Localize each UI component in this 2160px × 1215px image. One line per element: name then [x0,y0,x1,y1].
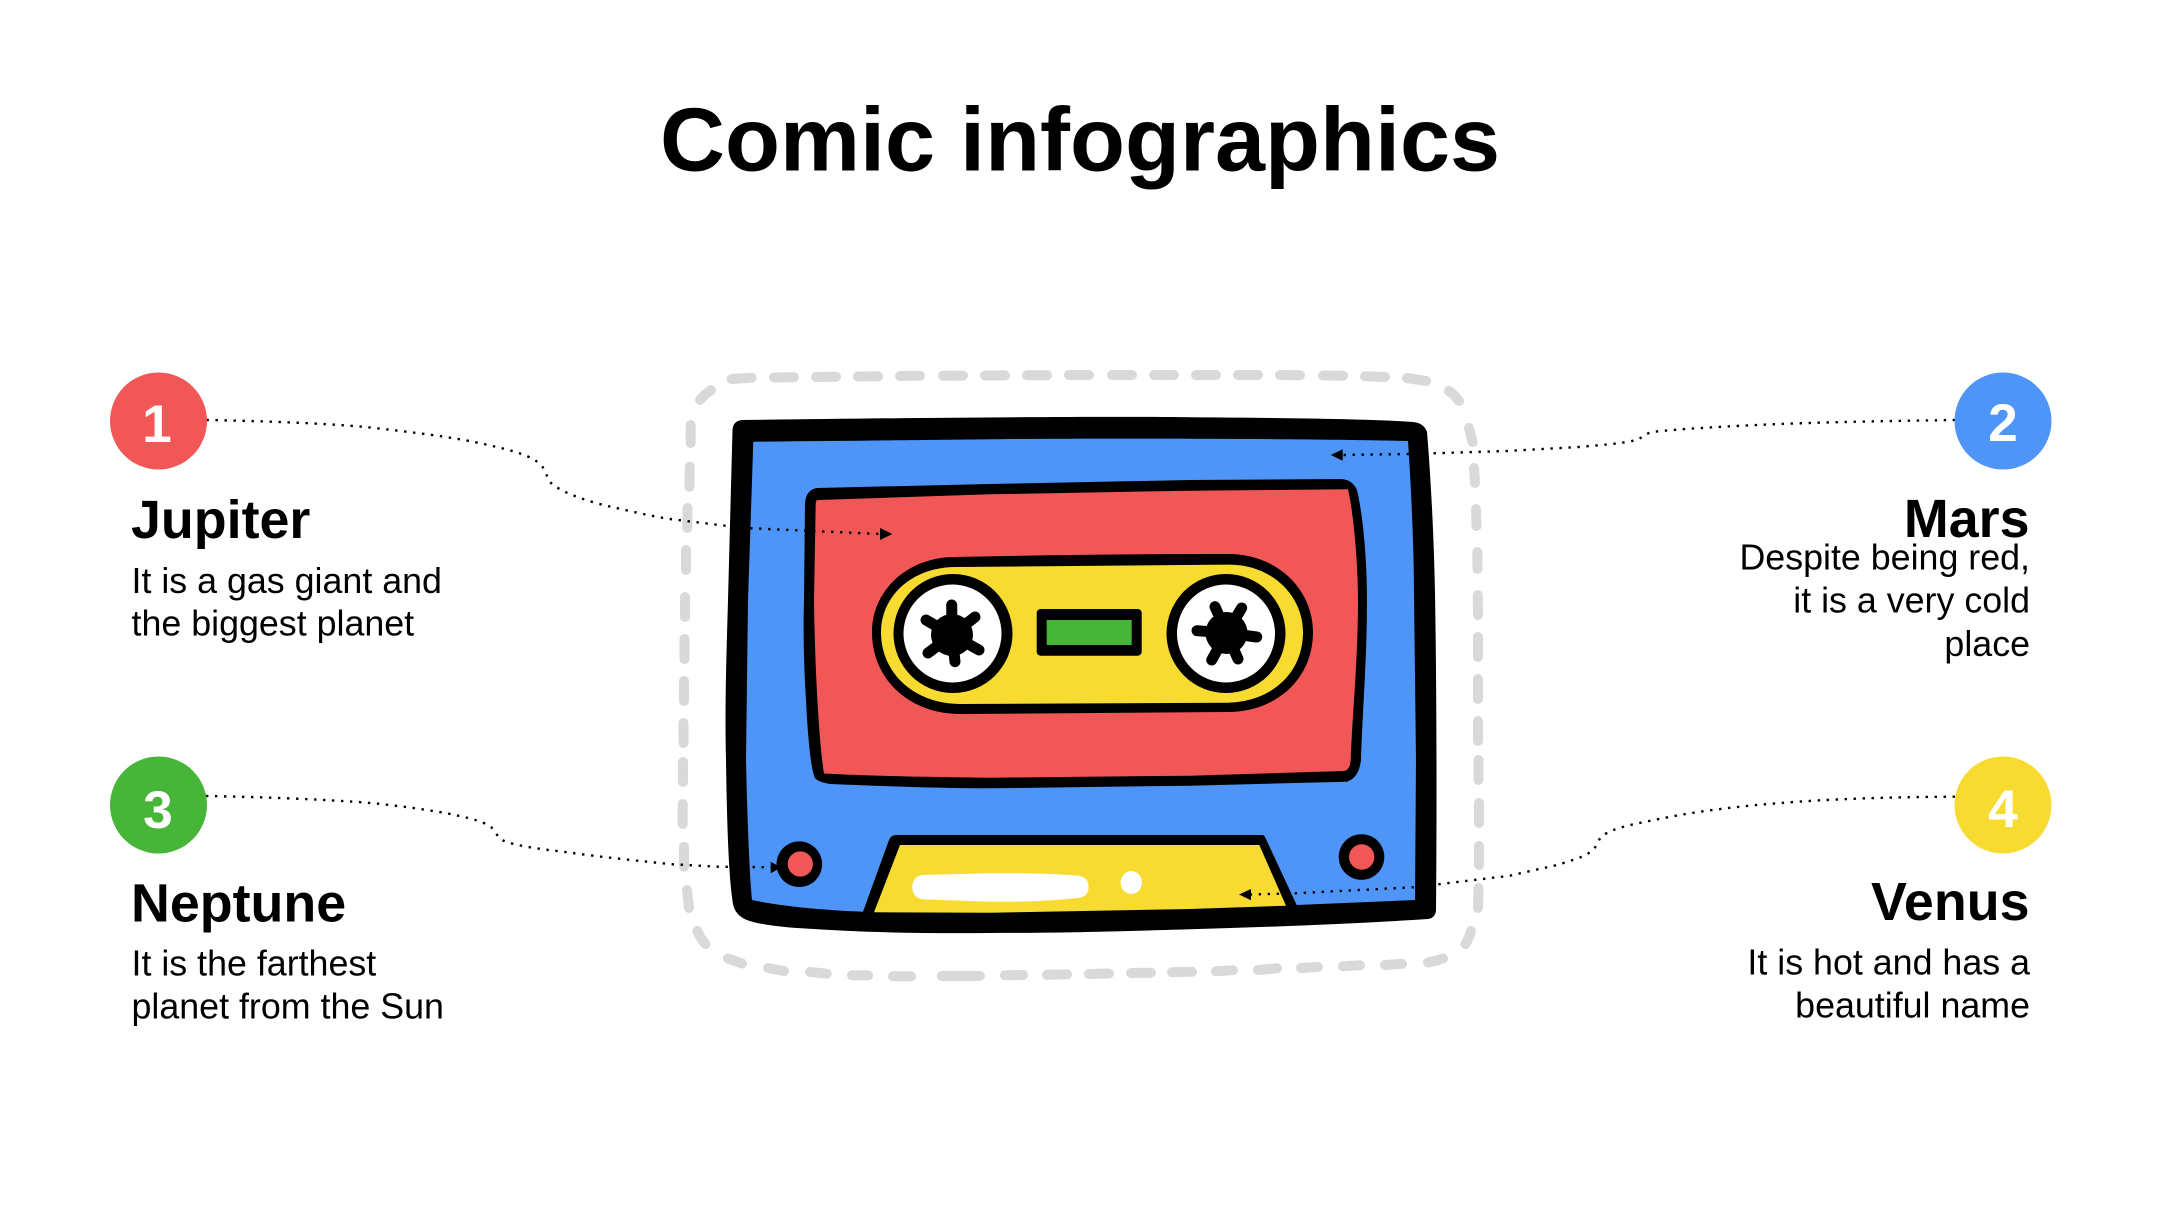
text: Jupiter description: the biggest planet [132,604,414,644]
text: Venus description: It is hot and has a [1747,942,2030,982]
cassette body [726,417,1437,933]
right reel [1166,574,1286,693]
white highlight bar [912,873,1089,902]
text: Mars description: place [1944,624,2030,664]
yellow tape window [872,554,1313,714]
heading: Venus: Venus [1871,872,2030,932]
connector 4 [1239,797,1955,900]
dashed sticker outline [683,375,1479,976]
text: Mars description: Despite being red, [1739,537,2030,577]
heading: Neptune: Neptune [131,874,346,934]
badge 2 [1954,372,2052,470]
title: Comic infographics [660,91,1500,191]
left screw [776,841,822,887]
text: Mars description: it is a very cold [1793,580,2030,620]
connector 3 [206,796,781,873]
text: Jupiter description: It is a gas giant and [132,561,442,601]
left reel [894,574,1012,693]
badge 4 [1954,756,2052,854]
connector 1 [206,420,892,540]
text: Neptune description: It is the farthest [132,943,376,983]
badge 3: 3 [143,781,173,840]
text: Neptune description: planet from the Sun [132,986,444,1026]
cassette illustration [726,417,1437,933]
heading: Jupiter: Jupiter [131,490,310,550]
badge 4: 4 [1988,780,2018,839]
connector 2 [1331,420,1955,461]
red label [804,479,1367,788]
bottom yellow trapezoid [860,835,1300,918]
badge 1: 1 [142,395,172,454]
white highlight dot [1121,871,1142,894]
right screw [1339,834,1384,880]
heading: Mars: Mars [1904,489,2030,549]
badge 2: 2 [1988,394,2018,453]
badge 3 [110,756,207,854]
badge 1 [110,372,207,470]
green tape indicator [1037,609,1142,656]
text: Venus description: beautiful name [1795,986,2030,1026]
